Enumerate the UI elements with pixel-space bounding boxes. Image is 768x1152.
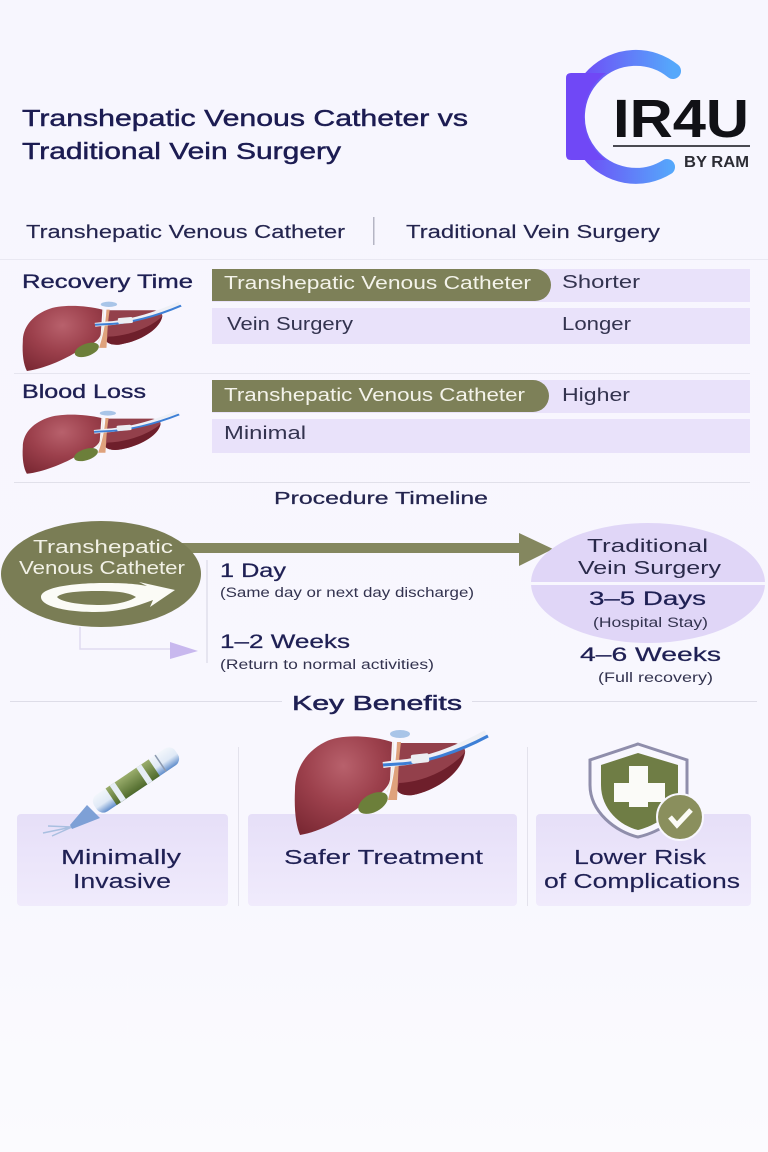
- catheter timeline text: 1–2 Weeks: [220, 632, 350, 653]
- catheter timeline text: (Same day or next day discharge): [220, 585, 474, 600]
- comparison header: Traditional Vein Surgery: [406, 221, 661, 242]
- icon: liver with catheter: [23, 411, 179, 474]
- heading: procedure timeline: Procedure Timeline: [274, 488, 488, 508]
- label: lower risk of complications: [544, 846, 740, 893]
- row: surgery recovery: Longer: [562, 314, 631, 334]
- heading: blood loss: Blood Loss: [22, 381, 146, 403]
- title: Traditional Vein Surgery: [22, 138, 342, 164]
- label: safer treatment: Safer Treatment: [284, 846, 483, 869]
- icon: catheter needle: [43, 744, 182, 836]
- comparison header: [26, 217, 661, 245]
- panel: recovery time: [22, 269, 750, 371]
- surgery recovery text: [580, 645, 721, 685]
- icon: liver with catheter: [295, 730, 488, 835]
- logo: IR4U by RAM: BY RAM: [684, 154, 749, 171]
- row: catheter recovery: [212, 269, 750, 302]
- title: Transhepatic Venous Catheter vs: [22, 105, 468, 131]
- catheter timeline text: (Return to normal activities): [220, 657, 434, 672]
- surgery ellipse: (Hospital Stay): [593, 615, 708, 630]
- row: catheter blood loss: Transhepatic Venous Catheter: [224, 385, 525, 405]
- comparison header: Transhepatic Venous Catheter: [26, 221, 345, 242]
- surgery ellipse: 3–5 Days: [589, 589, 706, 610]
- label: minimally invasive: Minimally: [61, 846, 182, 869]
- row: catheter blood loss: [212, 380, 750, 413]
- label: lower risk of complications: Lower Risk: [574, 846, 707, 869]
- row: surgery blood loss: Minimal: [224, 423, 306, 443]
- catheter ellipse: Venous Catheter: [19, 558, 185, 578]
- row: catheter recovery: Shorter: [562, 272, 640, 292]
- row: surgery blood loss: [212, 419, 750, 453]
- logo: IR4U by RAM: [566, 58, 750, 176]
- panel: blood loss: [22, 380, 750, 474]
- row: catheter recovery: Transhepatic Venous Catheter: [224, 273, 531, 293]
- catheter ellipse: [1, 521, 201, 627]
- icon: ring arrow: [41, 582, 175, 612]
- row: surgery recovery: [212, 308, 750, 344]
- heading: recovery time: Recovery Time: [22, 271, 193, 293]
- connector arrow: [80, 627, 198, 659]
- row: surgery recovery: Vein Surgery: [227, 314, 353, 334]
- row: catheter blood loss: Higher: [562, 385, 630, 405]
- label: minimally invasive: [61, 846, 182, 893]
- surgery ellipse: Traditional: [587, 536, 708, 556]
- catheter ellipse: Transhepatic: [33, 537, 173, 557]
- surgery ellipse: [525, 523, 768, 643]
- label: lower risk of complications: of Complications: [544, 870, 740, 893]
- title: [22, 105, 468, 164]
- catheter timeline text: [220, 561, 474, 672]
- icon: liver with catheter: [23, 302, 181, 371]
- panel: lower risk: [536, 744, 751, 906]
- surgery recovery text: 4–6 Weeks: [580, 645, 721, 666]
- surgery ellipse: Vein Surgery: [578, 558, 721, 578]
- label: minimally invasive: Invasive: [73, 870, 171, 893]
- catheter timeline text: 1 Day: [220, 561, 287, 582]
- panel: minimally invasive: [17, 744, 228, 906]
- icon: shield with cross and check: [590, 744, 703, 840]
- heading: key benefits: Key Benefits: [292, 693, 462, 715]
- surgery recovery text: (Full recovery): [598, 670, 713, 685]
- arrow: timeline: [180, 533, 553, 566]
- logo: IR4U by RAM: IR4U: [613, 89, 749, 149]
- panel: safer treatment: [248, 730, 517, 906]
